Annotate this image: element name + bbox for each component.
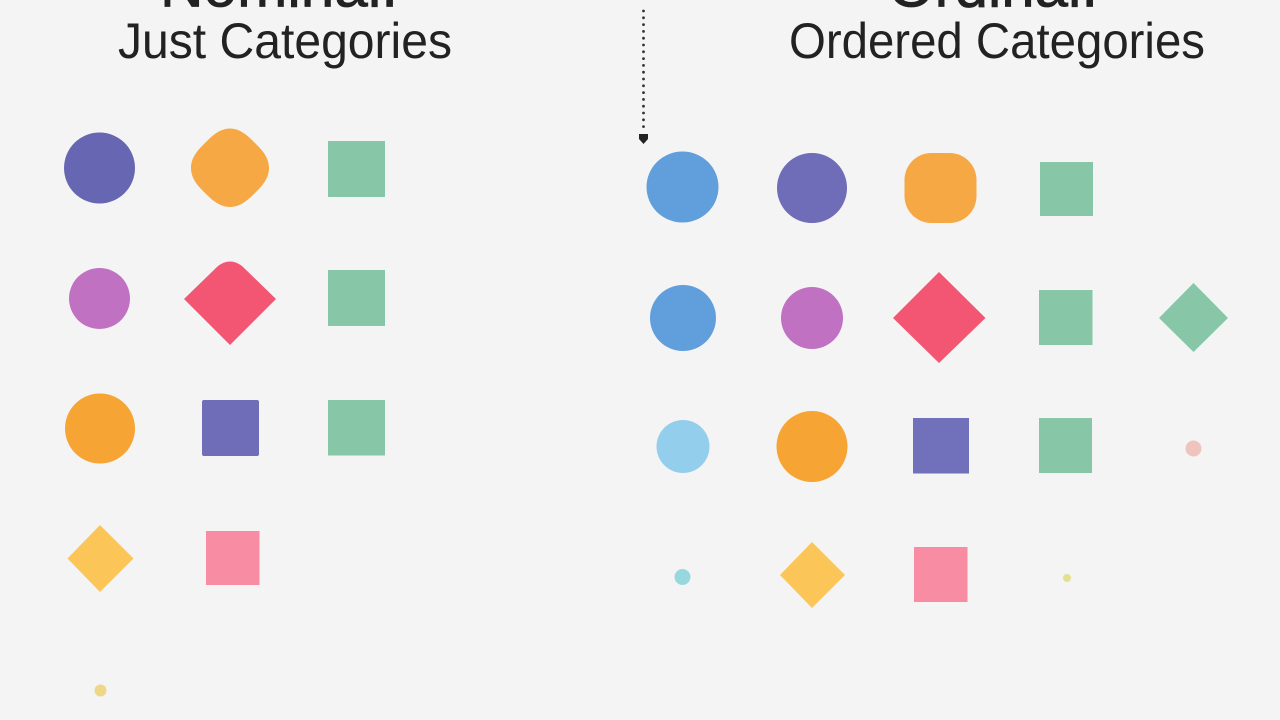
icon: indigo circle bbox=[777, 153, 847, 223]
icon: orange rounded square bbox=[904, 153, 976, 223]
icon: small pink dot bbox=[1186, 440, 1202, 456]
icon: small teal dot bbox=[674, 569, 690, 585]
icon: red diamond bbox=[893, 272, 986, 363]
subheading: Just Categories: Just Categories bbox=[118, 13, 452, 69]
icon: green square bbox=[1039, 418, 1092, 473]
icon: blue circle bbox=[650, 285, 716, 351]
icon: indigo square bbox=[202, 400, 259, 456]
icon: indigo square bbox=[913, 418, 969, 474]
icon: orange circle bbox=[65, 394, 135, 464]
icon: green square bbox=[328, 141, 385, 197]
icon: yellow diamond bbox=[780, 542, 845, 608]
icon: indigo circle bbox=[64, 132, 135, 204]
icon: green square bbox=[328, 400, 385, 456]
icon: tiny yellow dot bbox=[1063, 574, 1071, 582]
icon: green square bbox=[328, 270, 385, 326]
icon: green diamond bbox=[1159, 283, 1228, 352]
icon: pink square bbox=[914, 547, 968, 602]
icon: green square bbox=[1040, 162, 1093, 216]
icon: purple circle bbox=[69, 268, 130, 329]
icon: yellow diamond bbox=[68, 525, 134, 592]
icon: small yellow dot bbox=[94, 684, 106, 696]
icon: orange circle bbox=[776, 411, 848, 482]
icon: green square bbox=[1039, 290, 1092, 345]
icon: light blue circle bbox=[656, 420, 710, 473]
icon: orange rounded diamond bbox=[191, 128, 269, 207]
arrow: dotted vertical bbox=[639, 11, 648, 144]
subheading: Ordered Categories: Ordered Categories bbox=[789, 13, 1205, 69]
icon: red diamond bbox=[184, 262, 276, 345]
panel: ordinal bbox=[646, 0, 1228, 608]
icon: blue circle bbox=[646, 152, 718, 222]
icon: pink square bbox=[206, 531, 260, 585]
panel: nominal bbox=[64, 0, 452, 696]
icon: purple circle bbox=[781, 287, 843, 349]
